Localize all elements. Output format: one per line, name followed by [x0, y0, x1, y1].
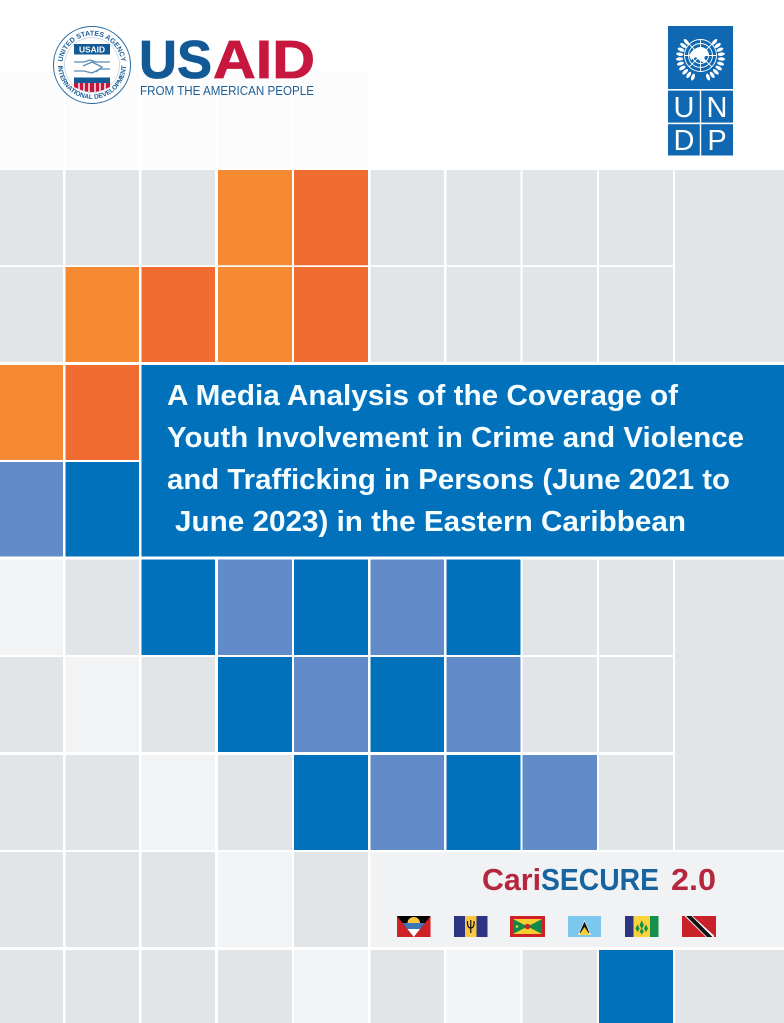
title text: June 2023) in the Eastern Caribbean — [175, 506, 686, 538]
icon: flag of Trinidad and Tobago — [682, 916, 716, 937]
letters: UNDP: D — [674, 125, 694, 157]
programme name: SECURE — [541, 862, 659, 897]
icon: flag of Saint Lucia — [568, 916, 601, 937]
icon: USAID seal — [53, 26, 131, 104]
letters: UNDP: U — [674, 92, 694, 124]
wordmark: USAID — [139, 30, 315, 90]
logo: USAID — [53, 26, 315, 104]
wordmark: USAID: AID — [213, 30, 315, 90]
icon: USAID seal: INTERNATIONAL DEVELOPMENT — [58, 65, 126, 99]
tagline: FROM THE AMERICAN PEOPLE — [140, 84, 314, 98]
title text: Youth Involvement in Crime and Violence — [167, 422, 744, 454]
panel: CariSECURE — [370, 852, 784, 947]
icon: flag of Barbados — [454, 916, 488, 937]
flags row — [397, 916, 716, 937]
icon: USAID seal: UNITED STATES AGENCY — [58, 30, 126, 62]
tile mosaic: pale tiles — [0, 560, 520, 1023]
panel: title — [142, 365, 784, 556]
programme name: 2.0 — [671, 862, 716, 897]
tile mosaic: blue tiles — [0, 462, 673, 1023]
icon: flag of Grenada — [510, 916, 545, 937]
icon: USAID seal: USAID — [79, 45, 105, 55]
logo: UNDP — [668, 26, 733, 157]
icon: flag of Antigua and Barbuda — [397, 916, 430, 937]
letters: UNDP: N — [707, 92, 727, 124]
title text — [167, 380, 744, 538]
title text: A Media Analysis of the Coverage of — [167, 380, 679, 412]
programme name — [482, 862, 716, 897]
letters: UNDP: P — [707, 125, 727, 157]
icon: flag of Saint Vincent and the Grenadines — [625, 916, 658, 937]
letters: UNDP — [674, 92, 727, 157]
wordmark: USAID: US — [139, 30, 212, 90]
icon: UN emblem — [676, 38, 725, 81]
tile mosaic: orange tiles — [0, 170, 368, 460]
title text: and Trafficking in Persons (June 2021 to — [167, 464, 730, 496]
programme name: Cari — [482, 862, 541, 897]
